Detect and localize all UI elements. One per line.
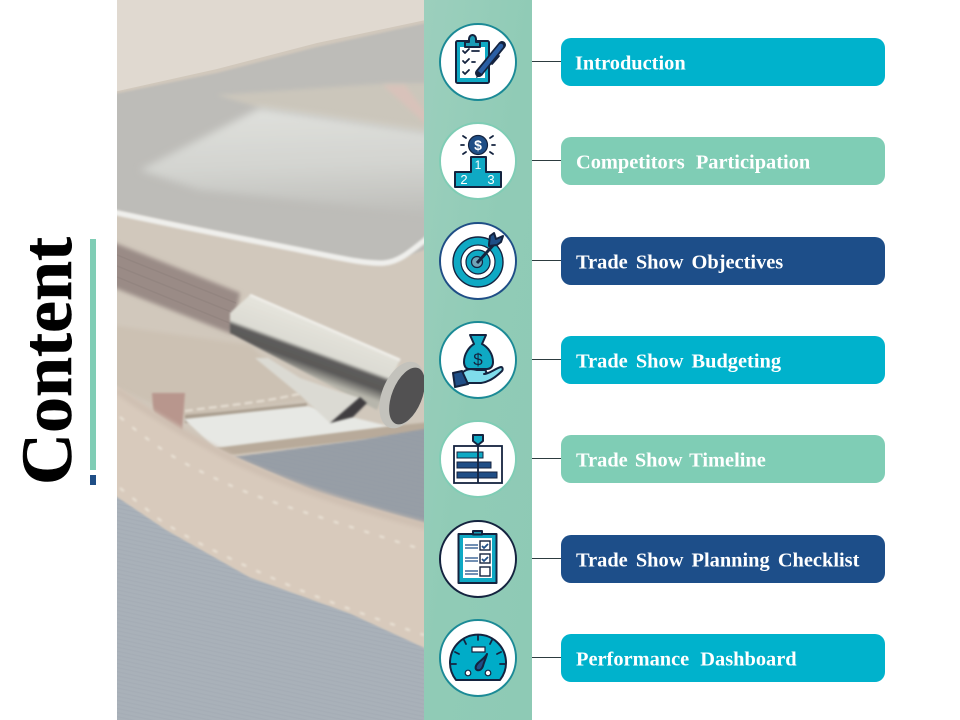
pen body [110,241,240,334]
icon: podium with dollar coin [440,123,516,199]
item 4: Trade Show Budgeting [561,336,885,384]
icon: podium with dollar coin: 2 [460,172,468,187]
icon: clipboard with pencil [440,24,516,100]
pen cap [230,295,400,410]
item 1: Introduction [561,38,885,86]
leather tab [152,393,185,431]
icon: podium with dollar coin: $ [474,137,482,153]
item 2: Competitors Participation [561,137,885,185]
item 2: Competitors Participation: Competitors Participation [576,152,811,174]
item 6: Trade Show Planning Checklist: Trade Show Planning Checklist [576,550,860,572]
green vertical band [424,0,532,720]
dark fabric [234,428,430,526]
item 1: Introduction: Introduction [575,52,686,74]
leather strap [117,417,424,648]
icon: money bag on hand: $ [473,350,483,369]
item 6: Trade Show Planning Checklist [561,535,885,583]
item 3: Trade Show Objectives [561,237,885,285]
photo: tablet, pen and leather case [100,0,440,720]
item 7: Performance Dashboard: Performance Dashboard [576,648,797,670]
icon: podium with dollar coin: 3 [487,172,495,187]
icon: gantt timeline board [440,421,516,497]
item 5: Trade Show Timeline: Trade Show Timeline [576,450,766,472]
title: Content: Content [7,237,87,485]
icon: planning checklist [440,521,516,597]
icon: target with arrow [440,223,516,299]
title accent bar [90,239,96,485]
connector lines [532,62,561,658]
leather flap [117,329,302,413]
icon: podium with dollar coin: 1 [475,158,482,172]
item 7: Performance Dashboard [561,634,885,682]
item 4: Trade Show Budgeting: Trade Show Budgeting [576,350,781,372]
icon: speedometer dashboard [440,620,516,696]
item 5: Trade Show Timeline [561,435,885,483]
icon: money bag on hand [440,322,516,398]
paper sheet [184,406,392,450]
item 3: Trade Show Objectives: Trade Show Objectives [576,252,783,274]
